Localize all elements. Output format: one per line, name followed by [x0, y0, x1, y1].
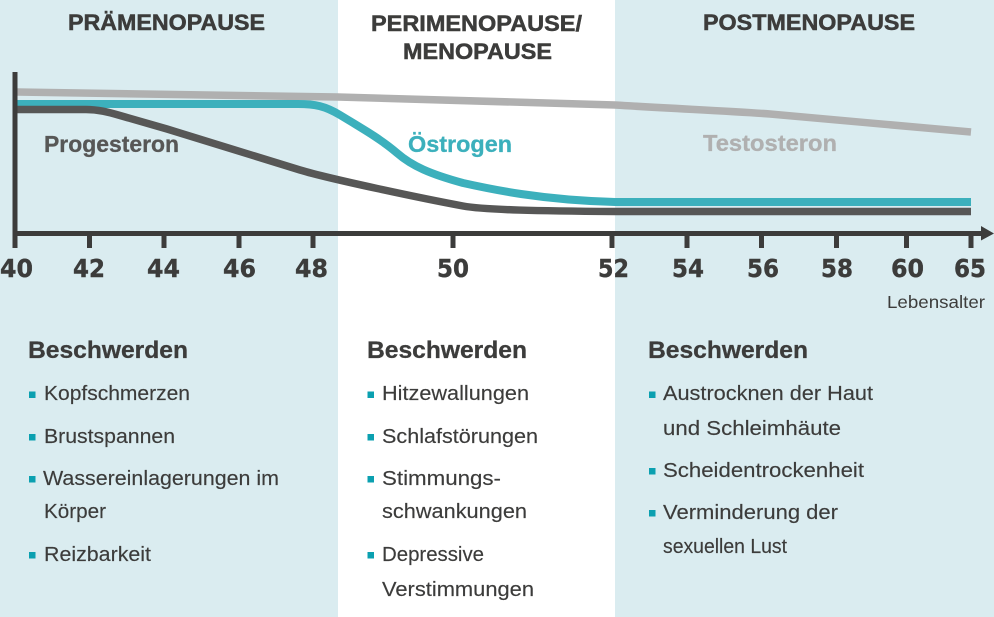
x axis age labels: 48: [295, 254, 328, 283]
line: estrogen: [17, 104, 971, 202]
list: Reizbarkeit: [44, 544, 151, 566]
list: sexuellen Lust: [663, 536, 787, 558]
x axis ticks: [15, 233, 971, 248]
list: und Schleimhäute: [663, 418, 841, 440]
x axis age labels: 52: [598, 254, 629, 283]
heading: perimenopause / menopause: [371, 11, 582, 64]
chart: hormone levels by age: [0, 72, 994, 312]
line: progesterone: [17, 110, 971, 212]
panel: postmenopause background: [615, 0, 994, 617]
x axis age labels: 60: [891, 254, 924, 283]
label: östrogen: Östrogen: [408, 131, 512, 157]
y axis: [12, 72, 18, 248]
x axis arrow: [13, 226, 994, 240]
heading: prämenopause: PRÄMENOPAUSE: [68, 10, 265, 35]
text block: beschwerden prämenopause: [28, 337, 279, 566]
heading: perimenopause / menopause: PERIMENOPAUSE/: [371, 11, 582, 36]
list: Austrocknen der Haut: [663, 383, 873, 405]
list: Stimmungs-: [382, 468, 501, 490]
list: [649, 383, 873, 558]
panel: perimenopause background: [338, 0, 615, 617]
list: Brustspannen: [44, 426, 175, 448]
x axis age labels: 42: [73, 254, 105, 283]
text block: beschwerden postmenopause: [648, 337, 873, 558]
list: [368, 383, 538, 601]
x axis age labels: 40: [0, 254, 33, 283]
subheading: Beschwerden: [367, 337, 527, 364]
list: schwankungen: [382, 501, 527, 523]
label: testosteron: Testosteron: [703, 130, 837, 156]
list: Kopfschmerzen: [44, 383, 190, 405]
x axis age labels: 56: [747, 254, 779, 283]
heading: perimenopause / menopause: MENOPAUSE: [403, 39, 552, 64]
label: progesteron: Progesteron: [44, 131, 179, 157]
x axis age labels: 46: [223, 254, 256, 283]
panel: prämenopause background: [0, 0, 338, 617]
subheading: Beschwerden: [648, 337, 808, 364]
subheading: Beschwerden: [28, 337, 188, 364]
x axis age labels: 44: [147, 254, 180, 283]
list: Schlafstörungen: [382, 426, 538, 448]
x axis age labels: 50: [437, 254, 469, 283]
x axis age labels: [0, 254, 986, 283]
list: Hitzewallungen: [382, 383, 529, 405]
x axis title: Lebensalter: [887, 292, 985, 312]
list: Verstimmungen: [382, 579, 534, 601]
list: Wassereinlagerungen im: [43, 468, 279, 490]
line: testosterone: [17, 92, 971, 132]
x axis age labels: 65: [954, 254, 986, 283]
list: Körper: [44, 501, 106, 523]
x axis age labels: 54: [672, 254, 704, 283]
list: [29, 383, 279, 566]
heading: postmenopause: POSTMENOPAUSE: [703, 10, 915, 35]
text block: beschwerden perimenopause: [367, 337, 538, 601]
x axis age labels: 58: [821, 254, 853, 283]
list: Depressive: [382, 544, 484, 566]
list: Scheidentrockenheit: [663, 460, 864, 482]
list: Verminderung der: [663, 502, 838, 524]
